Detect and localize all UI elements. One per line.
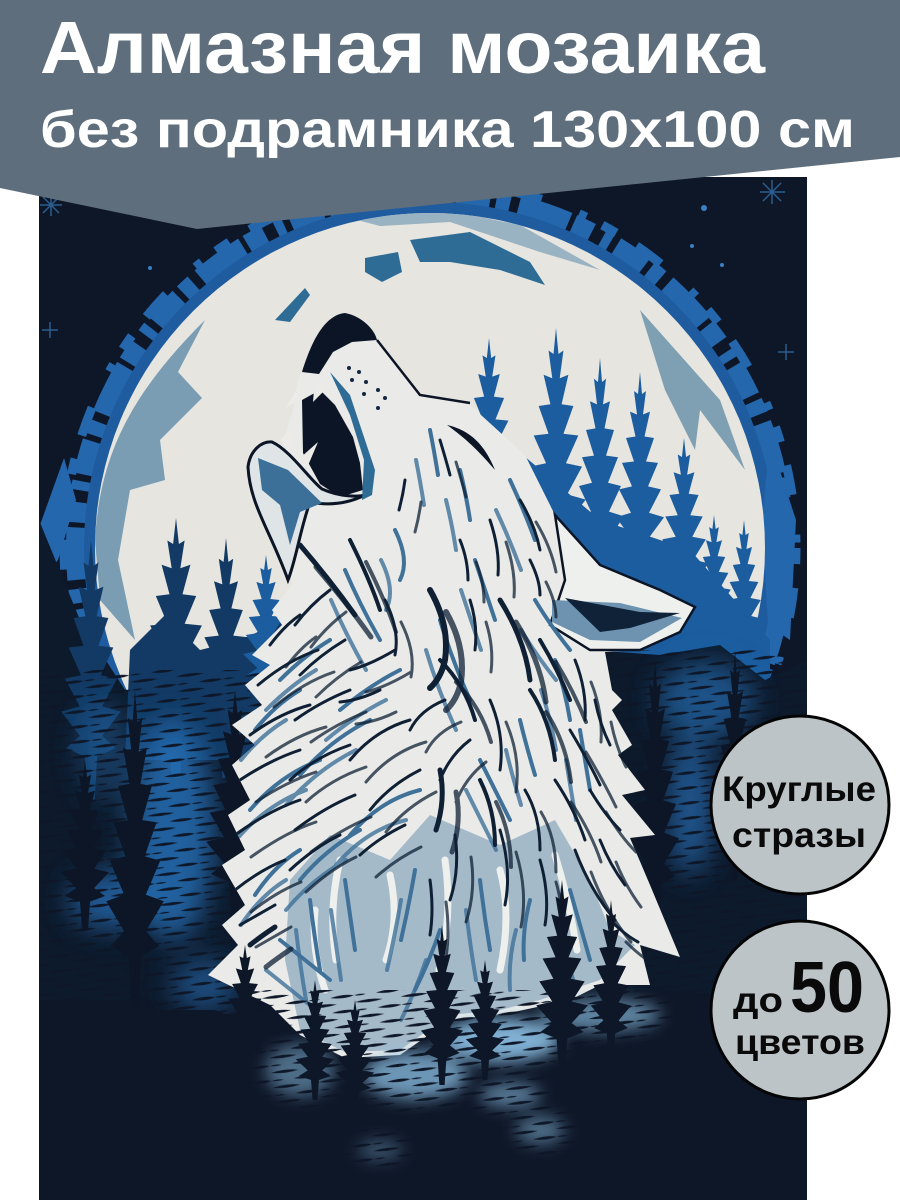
badge: round rhinestones: [711, 716, 889, 894]
dark ground: [169, 1010, 229, 1026]
badge: up to 50 colours: 50: [790, 948, 864, 1028]
ear: [550, 515, 695, 650]
teeth: [304, 390, 322, 464]
header banner: [0, 0, 900, 229]
badge: up to 50 colours: до: [733, 981, 783, 1020]
blue forest glow blobs: [70, 662, 753, 1011]
wolf fur silhouette: [208, 318, 695, 1058]
repeated dark fur strokes: [251, 462, 654, 967]
lower chest grey-blue fur: [285, 815, 635, 1052]
badge: up to 50 colours: [711, 921, 889, 1099]
jaw shading: [258, 458, 322, 545]
full moon: [95, 213, 765, 690]
mouth interior: [302, 390, 363, 497]
blue moon halo: [40, 194, 800, 690]
streak texture right: [600, 650, 807, 1050]
badge: round rhinestones: стразы: [732, 816, 866, 855]
stars: [40, 180, 794, 360]
star dots: [148, 205, 724, 270]
light blue blobs: [266, 999, 660, 1160]
moon tree row left: [61, 518, 285, 800]
whisker dots: [347, 366, 387, 410]
badge: round rhinestones: Круглые: [722, 770, 876, 809]
lower jaw: [248, 442, 365, 580]
foreground reflection zone at bottom: [169, 988, 668, 1168]
moon shadow craters: [95, 205, 770, 640]
fur strokes blue: [250, 430, 590, 990]
dark trunks of pines: [61, 650, 754, 1010]
dark ground mask right: [605, 645, 776, 849]
artwork: howling wolf and moon: [39, 177, 807, 1200]
streak texture over forest: [39, 670, 289, 1200]
closed eye: [447, 425, 495, 470]
forest behind wolf, on the moon: [463, 328, 770, 690]
dark ground mask left: [40, 524, 250, 841]
title: Алмазная мозаика: [40, 6, 766, 89]
nearer blue pine: [243, 555, 280, 678]
nose: [302, 313, 377, 374]
fur strokes dark: [235, 440, 638, 945]
repeated blue fur strokes: [236, 460, 576, 1020]
streak texture over reflections: [200, 990, 680, 1180]
night background: [39, 177, 807, 1064]
pale chest strands: [314, 855, 577, 990]
fur strokes: [235, 430, 654, 1020]
badge: up to 50 colours: цветов: [735, 1023, 865, 1062]
dark pine silhouettes at bottom: [223, 880, 631, 1110]
muzzle outline: [377, 340, 470, 403]
muzzle shading: [330, 372, 375, 500]
subtitle: без подрамника 130х100 см: [40, 101, 855, 159]
